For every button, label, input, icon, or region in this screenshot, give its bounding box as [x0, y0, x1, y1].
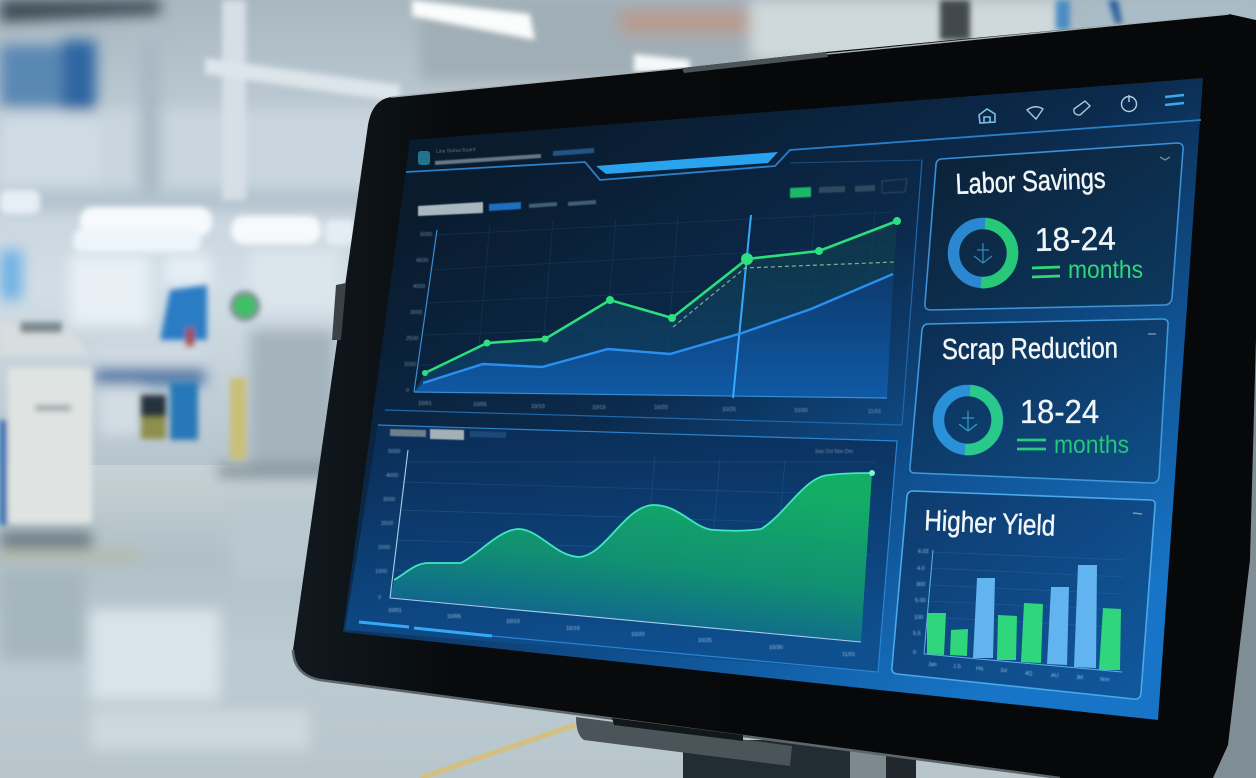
x axis labels: 10/05 — [473, 402, 487, 408]
x axis labels: 10/15 — [592, 405, 606, 411]
title: Labor Savings — [955, 163, 1106, 201]
top rim and button — [391, 14, 1229, 97]
y axis labels: 4000 — [386, 473, 398, 479]
axes — [414, 230, 887, 398]
y axis labels: 2500 — [381, 521, 393, 527]
nav icon: home — [979, 109, 995, 123]
x axis labels: 10/25 — [698, 638, 712, 644]
equals mark — [1032, 267, 1060, 277]
donut icon — [959, 411, 977, 431]
unit: months — [1054, 431, 1129, 459]
x axis labels: Jbl — [1076, 675, 1083, 681]
x axis labels: 10/25 — [722, 407, 736, 413]
x axis labels: Jan — [928, 662, 937, 668]
nav icon: menu — [1165, 95, 1184, 105]
x axis labels: 11/01 — [868, 409, 881, 415]
x axis labels: Hq — [976, 666, 983, 672]
donut chart — [954, 224, 1013, 283]
x axis labels — [928, 662, 1110, 683]
value: 18-24 — [1034, 220, 1116, 258]
x axis labels: 10/05 — [447, 614, 461, 620]
dashed forecast line — [673, 262, 895, 327]
nav icon: tag — [1027, 107, 1043, 119]
bars — [927, 565, 1121, 670]
panel: Higher Yield — [892, 491, 1155, 699]
x axis labels — [388, 608, 855, 658]
x axis labels: 10/10 — [506, 619, 520, 625]
title: Higher Yield — [924, 505, 1056, 543]
y axis labels: 4000 — [413, 284, 425, 290]
y axis labels: 6.02 — [918, 549, 929, 555]
unit: months — [1068, 256, 1143, 284]
blue series line — [423, 274, 893, 383]
side button — [332, 283, 346, 340]
logo and dashboard title — [418, 147, 594, 165]
area line — [394, 473, 872, 580]
y axis labels — [913, 549, 929, 656]
y axis labels: 1000 — [375, 569, 387, 575]
panel: Scrap Reduction — [910, 319, 1168, 483]
y axis labels: 4500 — [416, 258, 428, 264]
screen — [343, 78, 1203, 720]
header accent — [596, 152, 778, 174]
y axis labels: 5000 — [388, 449, 400, 455]
tablet body — [293, 14, 1256, 778]
y axis labels: 100 — [914, 615, 923, 621]
x axis labels: J.S — [953, 664, 961, 670]
chart tabs: Sep Oct Nov Dec — [815, 449, 854, 455]
tablet stand — [683, 340, 1256, 778]
panel: Labor Savings — [925, 143, 1183, 310]
x axis labels: 10/20 — [654, 405, 668, 411]
chart tabs — [390, 429, 854, 455]
y axis labels: 2500 — [406, 336, 418, 342]
mount arm — [1210, 340, 1256, 778]
x axis labels: Nov — [1100, 677, 1110, 683]
x axis labels: 10/10 — [531, 404, 545, 410]
x axis labels: Jul — [1000, 668, 1007, 674]
y axis labels: 3000 — [383, 497, 395, 503]
x axis labels: 11/01 — [842, 652, 855, 658]
panel: lower area chart — [345, 425, 897, 672]
y axis labels: 5000 — [420, 232, 432, 238]
y axis labels — [404, 232, 432, 394]
title: Scrap Reduction — [942, 332, 1118, 366]
collapse mark — [1133, 513, 1142, 514]
nav icon: label — [1074, 101, 1090, 115]
y axis labels: 2000 — [404, 362, 416, 368]
marker line — [733, 215, 751, 398]
chart tabs — [418, 179, 907, 216]
y axis labels: 5.00 — [915, 598, 926, 604]
header bar — [406, 95, 1201, 180]
scroll indicators — [359, 622, 492, 636]
grid — [420, 210, 892, 398]
x axis labels: 10/30 — [794, 408, 808, 414]
x axis labels — [418, 401, 881, 415]
grid — [926, 552, 1125, 627]
x axis labels: 10/20 — [631, 632, 645, 638]
data points — [422, 217, 901, 376]
logo and dashboard title: Line Status Board — [436, 147, 476, 155]
stand plate — [576, 717, 792, 766]
axes — [390, 450, 861, 642]
y axis labels: 0 — [378, 595, 381, 601]
value: 18-24 — [1020, 393, 1099, 430]
y axis labels: 3000 — [410, 310, 422, 316]
y axis labels: 4.0 — [917, 566, 925, 572]
area under lines — [414, 221, 897, 398]
x axis labels: 10/15 — [566, 626, 580, 632]
y axis labels: 300 — [916, 582, 925, 588]
nav icon: power — [1122, 95, 1136, 112]
collapse mark — [1148, 333, 1156, 335]
y axis labels: 5.5 — [913, 631, 921, 637]
axes — [924, 550, 1122, 672]
x axis labels: 10/30 — [769, 645, 783, 651]
bottom rim — [293, 650, 1060, 778]
x axis labels: 10/01 — [388, 608, 402, 614]
x axis labels: AU — [1051, 673, 1059, 679]
green series line — [425, 221, 897, 373]
collapse mark — [1160, 157, 1170, 160]
donut chart — [938, 390, 998, 450]
y axis labels: 2000 — [378, 545, 390, 551]
grid — [393, 456, 875, 636]
top button — [682, 52, 828, 73]
y axis labels: 0 — [406, 388, 409, 394]
x axis labels: 10/01 — [418, 401, 432, 407]
y axis labels — [375, 449, 400, 601]
x axis labels: 4Q — [1025, 671, 1033, 677]
donut icon — [974, 243, 992, 263]
green area — [390, 473, 872, 642]
panel: upper line chart — [385, 160, 922, 425]
end point — [869, 470, 875, 476]
equals mark — [1017, 440, 1046, 449]
y axis labels: 0 — [913, 650, 916, 656]
